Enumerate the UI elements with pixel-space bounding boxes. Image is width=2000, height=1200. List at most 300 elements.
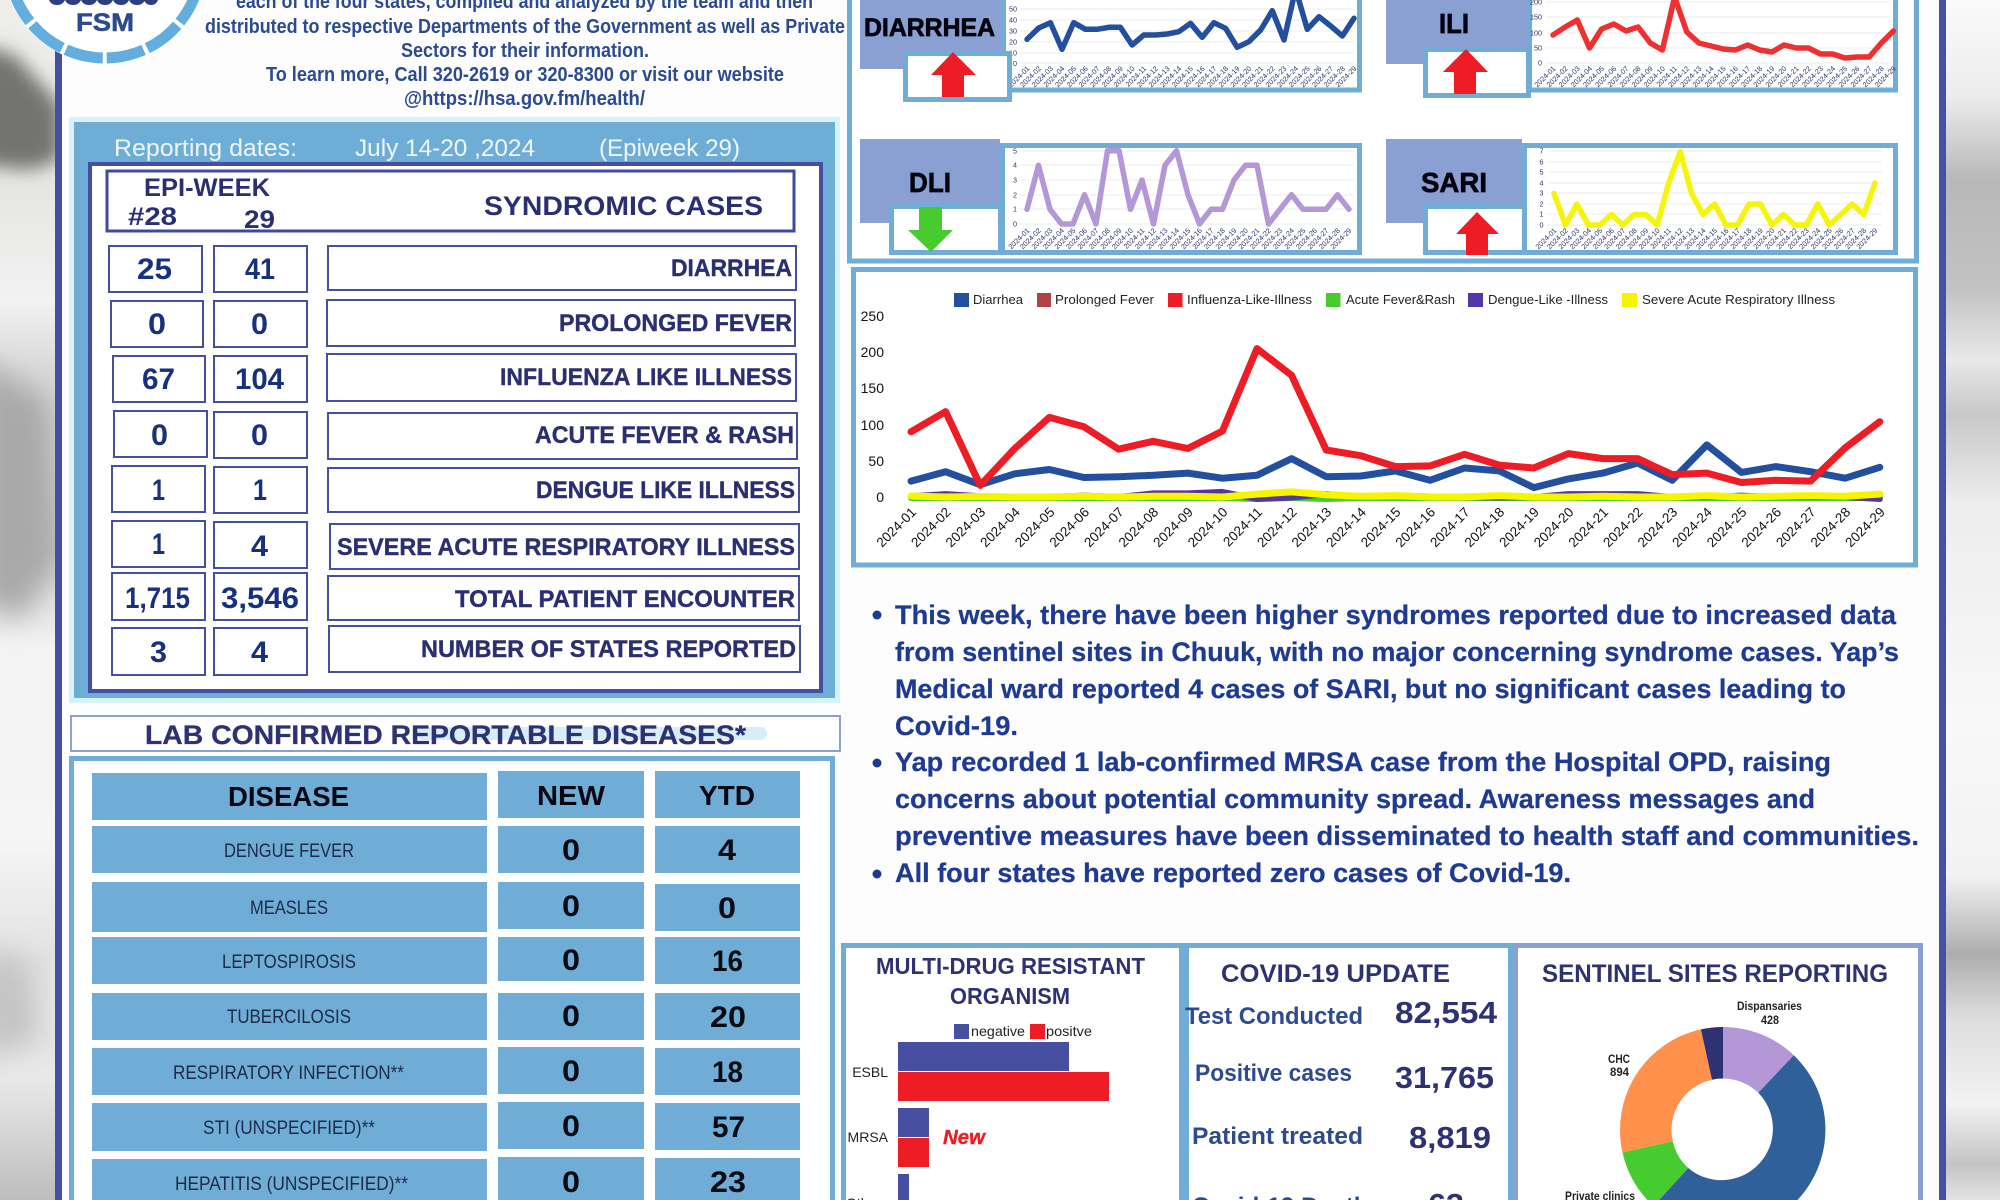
row: dengue fever: DENGUE FEVER xyxy=(224,841,354,862)
chart card: SARI: 2024-08 xyxy=(1614,226,1639,251)
chart card: DLI: 2024-23 xyxy=(1259,226,1284,251)
chart card: diarrhea xyxy=(860,0,1360,100)
chart card: ILI: 50 xyxy=(1534,44,1542,52)
chart card: ILI xyxy=(1386,0,1898,96)
panel: main line chart all syndromes xyxy=(854,270,1916,565)
row: tubercilosis: 20 xyxy=(710,1001,746,1034)
chart card: SARI: 2024-14 xyxy=(1682,226,1708,251)
chart card: ILI: 2024-07 xyxy=(1605,64,1630,89)
chart card: diarrhea: 30 xyxy=(1009,26,1017,36)
x axis labels: 2024-14 xyxy=(1323,504,1369,550)
chart card: SARI: 2024-22 xyxy=(1774,226,1799,251)
chart card: SARI: 5 xyxy=(1540,168,1544,176)
row: total patient encounter: TOTAL PATIENT ENCOUNTER xyxy=(455,586,795,613)
row: tubercilosis: 0 xyxy=(562,1000,580,1033)
x axis labels: 2024-01 xyxy=(873,505,919,550)
chart card: SARI: 2024-07 xyxy=(1602,226,1627,251)
panel: multi-drug resistant organism xyxy=(844,946,1182,1200)
x axis labels: 2024-02 xyxy=(908,505,954,550)
chart card: ILI: 2024-20 xyxy=(1763,64,1788,89)
x axis labels: 2024-21 xyxy=(1565,505,1611,550)
chart legend: Prolonged Fever xyxy=(1055,292,1155,307)
chart card: DLI: 2024-20 xyxy=(1225,226,1250,251)
table header: 29 xyxy=(244,206,275,234)
reporting dates line: Reporting dates: xyxy=(114,135,297,162)
x axis labels: 2024-15 xyxy=(1358,505,1404,550)
chart card: diarrhea: 2024-17 xyxy=(1193,64,1218,89)
row: leptospirosis: 16 xyxy=(712,945,743,978)
row: dengue like illness: 1 xyxy=(253,474,267,507)
row: total patient encounter: 3,546 xyxy=(221,582,299,615)
chart card: DLI: 2024-18 xyxy=(1202,226,1227,251)
chart card: SARI: 2024-26 xyxy=(1820,226,1845,251)
row: leptospirosis: 0 xyxy=(562,944,580,977)
chart card: DLI: 2024-12 xyxy=(1133,226,1158,251)
row: influenza like illness: 67 xyxy=(142,363,175,396)
chart card: DLI: 2024-14 xyxy=(1156,226,1181,251)
chart card: DLI: 2024-17 xyxy=(1190,226,1215,251)
x axis labels: 2024-04 xyxy=(977,504,1023,550)
chart card: DLI: 2024-22 xyxy=(1248,226,1273,251)
MDRO legend: positve xyxy=(1046,1023,1092,1039)
chart card: DLI: 4 xyxy=(1013,160,1017,170)
chart legend: Diarrhea xyxy=(973,292,1024,307)
chart card: diarrhea: 2024-08 xyxy=(1088,64,1113,89)
MDRO bar chart: ESBL xyxy=(852,1064,888,1080)
chart card: SARI: 2024-05 xyxy=(1579,226,1604,251)
lab heading xyxy=(71,716,840,751)
row: total patient encounter: 1,715 xyxy=(125,582,190,615)
chart card: ILI: 2024-03 xyxy=(1557,64,1582,89)
chart card: ILI: 0 xyxy=(1538,58,1542,68)
chart card: diarrhea: 2024-04 xyxy=(1041,64,1066,89)
chart legend: Acute Fever&Rash xyxy=(1346,292,1455,307)
x axis labels: 2024-08 xyxy=(1116,505,1161,550)
row: hepatitis unspecified xyxy=(92,1157,800,1200)
chart card: diarrhea: 2024-02 xyxy=(1018,64,1043,89)
stat: positive cases xyxy=(1195,1060,1494,1095)
row: diarrhea xyxy=(109,246,796,292)
chart card: diarrhea: 40 xyxy=(1009,16,1017,24)
panel: sentinel sites reporting xyxy=(1516,946,1920,1200)
chart legend: Severe Acute Respiratory Illness xyxy=(1642,292,1836,307)
x axis labels: 2024-24 xyxy=(1669,504,1715,550)
x axis labels: 2024-23 xyxy=(1635,505,1680,550)
text block: weekly summary bullets: All four states have reported zero cases of Covid-19. xyxy=(895,858,1571,888)
chart card: diarrhea: 2024-25 xyxy=(1287,64,1312,89)
row: number of states reported: NUMBER OF STATES REPORTED xyxy=(421,636,796,663)
y axis labels: 200 xyxy=(861,344,884,360)
chart legend: Influenza-Like-Illness xyxy=(1187,292,1313,307)
panel: sentinel sites reporting: SENTINEL SITES REPORTING xyxy=(1542,960,1888,988)
x axis labels: 2024-10 xyxy=(1185,505,1231,550)
chart card: SARI: 2 xyxy=(1540,200,1544,208)
x axis labels: 2024-05 xyxy=(1012,505,1058,550)
chart card: diarrhea: 2024-14 xyxy=(1158,64,1183,89)
chart card: SARI: 2024-29 xyxy=(1854,226,1879,251)
header description text: Sectors for their information. xyxy=(401,40,649,62)
x axis labels: 2024-25 xyxy=(1704,505,1750,550)
row: leptospirosis xyxy=(92,937,800,984)
chart card: diarrhea: 0 xyxy=(1013,59,1017,68)
row: severe acute respiratory illness: 1 xyxy=(152,528,165,561)
chart card: ILI: 2024-10 xyxy=(1642,64,1667,89)
chart card: SARI: 2024-02 xyxy=(1545,226,1570,251)
chart card: ILI: 2024-14 xyxy=(1690,64,1716,89)
MDRO legend xyxy=(954,1023,1092,1039)
chart card: SARI: 2024-24 xyxy=(1797,226,1822,251)
chart card: DLI: 1 xyxy=(1013,204,1017,214)
chart card: SARI: 0 xyxy=(1540,220,1544,230)
chart card: SARI: 2024-25 xyxy=(1809,226,1834,251)
chart card: SARI: 2024-10 xyxy=(1637,226,1662,251)
text block: weekly summary bullets: concerns about potential community spread. Awareness messages and xyxy=(895,784,1815,814)
chart card: ILI: 2024-28 xyxy=(1861,64,1886,89)
row: sti unspecified: 57 xyxy=(712,1111,745,1144)
row: diarrhea: 25 xyxy=(137,253,172,286)
chart card: ILI: 2024-18 xyxy=(1739,64,1764,89)
row: hepatitis unspecified: 23 xyxy=(710,1166,746,1199)
x axis labels: 2024-20 xyxy=(1531,505,1577,550)
header description text: @https://hsa.gov.fm/health/ xyxy=(404,88,645,110)
chart card: SARI xyxy=(1386,139,1896,255)
donut labels: 894 xyxy=(1610,1065,1629,1079)
MDRO legend: negative xyxy=(971,1023,1025,1039)
chart card: DLI: 2024-13 xyxy=(1144,226,1169,251)
chart card: DLI: 2024-05 xyxy=(1052,226,1077,251)
stat: tests conducted xyxy=(1185,995,1498,1030)
row: tubercilosis xyxy=(92,993,800,1040)
chart card: SARI: 2024-27 xyxy=(1832,226,1857,251)
chart card: SARI: 1 xyxy=(1540,210,1544,218)
text block: weekly summary bullets: Yap recorded 1 lab-confirmed MRSA case from the Hospital OPD, raising xyxy=(895,747,1831,777)
chart card: ILI: 2024-27 xyxy=(1849,64,1874,89)
row: measles: 0 xyxy=(562,890,580,923)
chart card: diarrhea: DIARRHEA xyxy=(864,14,995,42)
x axis labels: 2024-17 xyxy=(1427,505,1473,550)
chart card: DLI: 3 xyxy=(1013,176,1017,184)
chart card: ILI: 2024-05 xyxy=(1581,64,1606,89)
stat: positive cases: 31,765 xyxy=(1395,1060,1494,1095)
chart card: ILI: 2024-24 xyxy=(1812,64,1837,89)
row: sti unspecified xyxy=(92,1102,800,1151)
chart card: diarrhea: 2024-10 xyxy=(1111,64,1137,89)
chart card: diarrhea: 2024-09 xyxy=(1100,64,1125,89)
chart card: DLI: 2024-07 xyxy=(1075,226,1100,251)
x axis labels: 2024-03 xyxy=(943,505,988,550)
table column headers: NEW xyxy=(537,780,606,811)
y axis labels xyxy=(861,308,884,505)
chart card: DLI: 5 xyxy=(1013,146,1017,156)
table header: #28 xyxy=(128,203,177,231)
chart card: diarrhea: 2024-01 xyxy=(1006,64,1031,89)
table column headers: YTD xyxy=(699,780,755,811)
chart card: diarrhea: 2024-21 xyxy=(1240,64,1265,89)
y axis labels: 0 xyxy=(876,489,884,505)
panel: covid-19 update: COVID-19 UPDATE xyxy=(1221,960,1450,988)
table column headers xyxy=(92,771,800,820)
chart card: ILI: ILI xyxy=(1439,8,1469,39)
chart card: ILI: 2024-19 xyxy=(1751,64,1776,89)
chart card: DLI: 2024-26 xyxy=(1294,226,1319,251)
row: severe acute respiratory illness xyxy=(112,521,799,569)
row: dengue fever: 0 xyxy=(562,834,580,867)
chart card: ILI: 2024-13 xyxy=(1678,64,1703,89)
chart card: SARI: 2024-18 xyxy=(1728,226,1753,251)
chart card: diarrhea: 2024-28 xyxy=(1322,64,1347,89)
series: dengue-like and acute fever lines near zero xyxy=(911,492,1880,499)
chart card: diarrhea: 2024-29 xyxy=(1333,64,1358,89)
chart card: SARI: 4 xyxy=(1540,178,1544,188)
chart card: diarrhea: 2024-24 xyxy=(1275,64,1300,89)
chart card: DLI: 2024-19 xyxy=(1213,226,1238,251)
logo: FSM circular emblem: FSM xyxy=(76,9,134,37)
chart card: SARI: 2024-06 xyxy=(1591,226,1616,251)
header description text: To learn more, Call 320-2619 or 320-8300 or visit our website xyxy=(266,64,784,86)
chart card: DLI xyxy=(860,139,1360,252)
row: respiratory infection: 0 xyxy=(562,1055,580,1088)
chart card: DLI: 2024-29 xyxy=(1328,226,1353,251)
panel: syndromic cases table xyxy=(69,117,840,703)
chart card: SARI: 2024-09 xyxy=(1625,226,1650,251)
table header xyxy=(107,171,794,234)
chart card: DLI: 2024-16 xyxy=(1179,226,1204,251)
lab heading: LAB CONFIRMED REPORTABLE DISEASES* xyxy=(145,720,747,750)
table header: EPI-WEEK xyxy=(144,174,270,202)
chart card: SARI: 2024-19 xyxy=(1740,226,1765,251)
row: measles: 0 xyxy=(718,892,736,925)
chart card: DLI: 2024-10 xyxy=(1110,226,1135,251)
chart card: SARI: 3 xyxy=(1540,188,1544,198)
chart card: DLI: 2024-24 xyxy=(1271,226,1296,251)
series: influenza-like illness xyxy=(911,349,1880,485)
chart legend xyxy=(954,292,1836,307)
chart card: ILI: 150 xyxy=(1530,12,1542,22)
chart card: SARI: 2024-21 xyxy=(1763,226,1788,251)
header description text xyxy=(205,0,845,110)
row: influenza like illness: 104 xyxy=(235,363,284,396)
stat: patient treated: Patient treated xyxy=(1192,1123,1363,1150)
chart card: diarrhea: 2024-07 xyxy=(1076,64,1102,89)
row: respiratory infection: 18 xyxy=(712,1056,743,1089)
row: prolonged fever: 0 xyxy=(148,308,166,341)
chart card: DLI: 2024-27 xyxy=(1305,226,1330,251)
donut labels xyxy=(1565,999,1802,1200)
row: influenza like illness xyxy=(113,354,796,402)
chart card: DLI: 2024-03 xyxy=(1029,226,1054,251)
header description text: distributed to respective Departments of the Government as well as Private xyxy=(205,16,845,38)
row: number of states reported xyxy=(112,626,800,675)
stat: patient treated: 8,819 xyxy=(1409,1120,1491,1155)
chart card: diarrhea: 2024-27 xyxy=(1310,64,1335,89)
x axis labels: 2024-16 xyxy=(1392,505,1438,550)
chart card: ILI: 2024-08 xyxy=(1617,64,1643,89)
MDRO bar chart: MRSA xyxy=(848,1129,889,1145)
chart card: DLI: 2024-25 xyxy=(1282,226,1307,251)
y axis labels: 50 xyxy=(868,453,884,469)
MDRO bar chart: New xyxy=(943,1127,986,1149)
chart card: SARI: 6 xyxy=(1540,158,1544,166)
chart card: SARI: 2024-03 xyxy=(1556,226,1581,251)
row: diarrhea: DIARRHEA xyxy=(671,255,792,282)
stat: tests conducted: Test Conducted xyxy=(1185,1003,1363,1030)
row: dengue fever: 4 xyxy=(718,834,736,867)
row: hepatitis unspecified: 0 xyxy=(562,1166,580,1199)
chart card: ILI: 2024-11 xyxy=(1654,64,1679,89)
chart card: diarrhea: 2024-19 xyxy=(1217,64,1242,89)
row: sti unspecified: STI (UNSPECIFIED)** xyxy=(203,1118,376,1139)
chart card: SARI: 2024-12 xyxy=(1660,226,1685,251)
x axis labels: 2024-28 xyxy=(1808,505,1853,550)
chart card: ILI: 2024-02 xyxy=(1545,64,1570,89)
stat: positive cases: Positive cases xyxy=(1195,1060,1352,1087)
chart card: DLI: 2024-28 xyxy=(1317,226,1342,251)
chart card: SARI: 2024-01 xyxy=(1533,226,1558,251)
chart card: DLI: 2024-01 xyxy=(1006,226,1031,251)
row: prolonged fever xyxy=(111,300,795,347)
row: total patient encounter xyxy=(112,573,799,620)
row: respiratory infection: RESPIRATORY INFECTION** xyxy=(173,1063,405,1084)
chart card: SARI: 2024-17 xyxy=(1717,226,1742,251)
chart card: DLI: 2024-15 xyxy=(1167,226,1192,251)
donut labels: 428 xyxy=(1761,1013,1779,1027)
y axis labels: 150 xyxy=(861,380,884,396)
chart card: SARI: 7 xyxy=(1540,146,1544,156)
chart card: diarrhea: 2024-23 xyxy=(1263,64,1288,89)
MDRO bar chart xyxy=(846,1042,1109,1200)
chart card: SARI: 2024-28 xyxy=(1843,226,1868,251)
chart card: DLI: 2024-09 xyxy=(1098,226,1123,251)
row: measles xyxy=(92,882,800,932)
chart legend: Dengue-Like -Illness xyxy=(1488,292,1608,307)
MDRO heading: ORGANISM xyxy=(950,983,1070,1009)
chart card: DLI: DLI xyxy=(909,167,951,198)
row: sti unspecified: 0 xyxy=(562,1110,580,1143)
chart card: DLI: 2 xyxy=(1013,190,1017,200)
chart card: DLI: 2024-04 xyxy=(1041,226,1066,251)
chart card: diarrhea: 2024-26 xyxy=(1298,64,1323,89)
reporting dates line: (Epiweek 29) xyxy=(599,135,740,162)
row: dengue like illness xyxy=(112,466,799,513)
series: diarrhea xyxy=(911,445,1880,488)
chart card: DLI: 0 xyxy=(1013,220,1017,228)
chart card: diarrhea: 50 xyxy=(1009,4,1017,14)
chart card: ILI: 2024-29 xyxy=(1873,64,1898,89)
text block: weekly summary bullets: preventive measures have been disseminated to health staff and communities. xyxy=(895,821,1919,851)
row: acute fever and rash: ACUTE FEVER & RASH xyxy=(535,422,794,449)
text block: weekly summary bullets xyxy=(872,600,1919,888)
x axis labels: 2024-06 xyxy=(1046,505,1092,550)
row: dengue like illness: 1 xyxy=(152,474,165,507)
row: acute fever and rash: 0 xyxy=(151,419,168,452)
chart card: ILI: 2024-01 xyxy=(1532,64,1557,89)
panel: lab confirmed reportable diseases xyxy=(71,716,840,1200)
chart card: diarrhea: 2024-03 xyxy=(1030,64,1055,89)
MDRO heading xyxy=(876,953,1145,1009)
chart card: SARI: 2024-04 xyxy=(1568,226,1593,251)
row: acute fever and rash: 0 xyxy=(251,419,268,452)
MDRO heading: MULTI-DRUG RESISTANT xyxy=(876,953,1145,979)
row: prolonged fever: 0 xyxy=(251,308,268,341)
x axis labels: 2024-18 xyxy=(1462,505,1507,550)
chart card: DLI: 2024-21 xyxy=(1236,226,1261,251)
chart card: diarrhea: 2024-22 xyxy=(1252,64,1277,89)
chart card: diarrhea: 20 xyxy=(1009,38,1017,46)
row: measles: MEASLES xyxy=(250,898,328,919)
reporting dates line: July 14-20 ,2024 xyxy=(355,135,535,162)
chart card: ILI: 2024-15 xyxy=(1703,64,1728,89)
row: dengue like illness: DENGUE LIKE ILLNESS xyxy=(536,477,795,504)
chart card: diarrhea: 2024-18 xyxy=(1205,64,1230,89)
row: prolonged fever: PROLONGED FEVER xyxy=(559,310,792,337)
row: number of states reported: 3 xyxy=(150,636,167,669)
chart card: ILI: 2024-16 xyxy=(1715,64,1740,89)
table column headers: DISEASE xyxy=(228,781,349,812)
text block: weekly summary bullets: This week, there have been higher syndromes reported due to increased data xyxy=(895,600,1897,630)
chart card: ILI: 2024-12 xyxy=(1666,64,1691,89)
chart card: SARI: 2024-11 xyxy=(1648,226,1673,251)
table header: SYNDROMIC CASES xyxy=(484,191,763,221)
chart card: diarrhea: 2024-12 xyxy=(1135,64,1160,89)
y axis labels: 250 xyxy=(861,308,884,324)
chart card: ILI: 2024-21 xyxy=(1776,64,1801,89)
background: grey shadow strip left xyxy=(0,0,60,1200)
chart card: diarrhea: 2024-05 xyxy=(1053,64,1078,89)
x axis labels: 2024-27 xyxy=(1773,505,1819,550)
chart card: diarrhea: 10 xyxy=(1009,48,1017,58)
logo: FSM circular emblem xyxy=(3,0,207,64)
chart card: diarrhea: 2024-15 xyxy=(1170,64,1195,89)
donut chart xyxy=(1620,1027,1825,1200)
row: hepatitis unspecified: HEPATITIS (UNSPECIFIED)** xyxy=(175,1174,409,1195)
stat: covid-19 deaths xyxy=(1192,1187,1464,1200)
series: severe acute respiratory illness xyxy=(911,492,1880,497)
x axis labels: 2024-11 xyxy=(1220,505,1265,549)
chart card: ILI: 100 xyxy=(1530,28,1542,38)
row: diarrhea: 41 xyxy=(245,253,275,286)
row: tubercilosis: TUBERCILOSIS xyxy=(227,1007,351,1028)
chart card: diarrhea: 2024-20 xyxy=(1228,64,1253,89)
row: respiratory infection xyxy=(92,1047,800,1095)
chart card: DLI: 2024-06 xyxy=(1064,226,1089,251)
chart card: ILI: 2024-09 xyxy=(1630,64,1655,89)
chart card: ILI: 2024-06 xyxy=(1593,64,1618,89)
x axis labels: 2024-13 xyxy=(1289,505,1334,550)
row: severe acute respiratory illness: 4 xyxy=(251,530,268,563)
reporting dates line xyxy=(114,135,740,162)
chart card: ILI: 2024-22 xyxy=(1788,64,1813,89)
x axis labels: 2024-12 xyxy=(1254,505,1300,550)
stat: patient treated xyxy=(1192,1120,1491,1155)
row: acute fever and rash xyxy=(114,411,797,459)
donut labels: Dispansaries xyxy=(1737,999,1802,1013)
panel: covid-19 update xyxy=(1185,946,1510,1200)
chart card: diarrhea: 2024-06 xyxy=(1065,64,1090,89)
chart card: diarrhea: 2024-13 xyxy=(1147,64,1172,89)
donut labels: CHC xyxy=(1608,1052,1630,1066)
x axis labels: 2024-19 xyxy=(1496,505,1542,550)
chart card: SARI: SARI xyxy=(1421,167,1487,198)
chart card: SARI: 2024-16 xyxy=(1705,226,1731,251)
chart card: SARI: 2024-23 xyxy=(1786,226,1811,251)
x axis labels: 2024-29 xyxy=(1842,505,1888,550)
stat: tests conducted: 82,554 xyxy=(1395,995,1498,1030)
text block: weekly summary bullets: Medical ward reported 4 cases of SARI, but no significant cases leading to xyxy=(895,674,1846,704)
x axis labels xyxy=(873,504,1888,550)
row: leptospirosis: LEPTOSPIROSIS xyxy=(222,952,356,973)
row: dengue fever xyxy=(92,826,800,873)
chart card: diarrhea: 2024-16 xyxy=(1182,64,1207,89)
